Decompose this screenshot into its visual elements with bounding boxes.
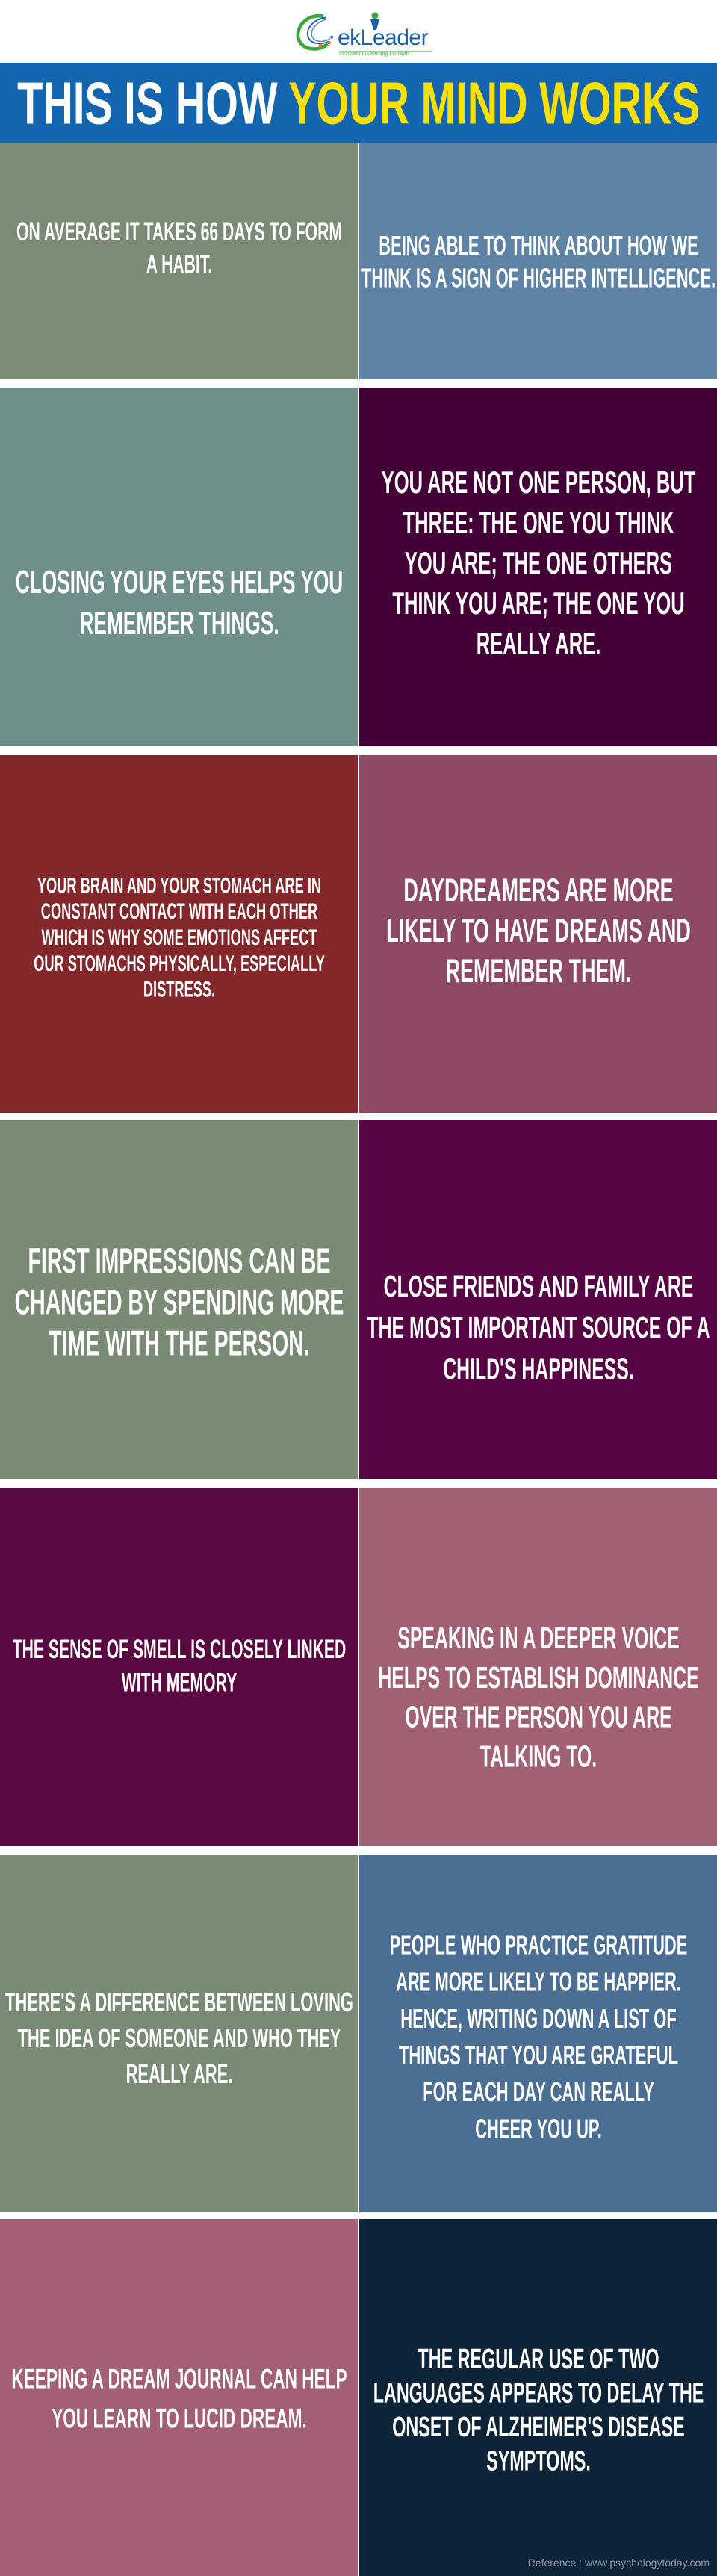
panel: habit: A HABIT. xyxy=(146,250,212,279)
panel: loving idea: THE IDEA OF SOMEONE AND WHO THEY xyxy=(17,2024,341,2053)
panel: intelligence: BEING ABLE TO THINK ABOUT HOW WE xyxy=(379,232,698,261)
panel: gratitude: THINGS THAT YOU ARE GRATEFUL xyxy=(399,2041,677,2070)
panel: loving idea xyxy=(0,1855,358,2212)
icon: swirl xyxy=(296,13,333,51)
panel: daydreamers: DAYDREAMERS ARE MORE xyxy=(403,872,673,909)
panel: daydreamers: REMEMBER THEM. xyxy=(445,952,631,990)
panel: deeper voice: OVER THE PERSON YOU ARE xyxy=(405,1701,671,1734)
panel: closing eyes xyxy=(0,388,358,746)
panel: daydreamers xyxy=(359,755,717,1113)
panel: brain stomach xyxy=(0,755,358,1113)
panel: smell: THE SENSE OF SMELL IS CLOSELY LINKED xyxy=(12,1636,346,1664)
panel: three persons: THINK YOU ARE; THE ONE YOU xyxy=(392,586,684,621)
panel: brain stomach: YOUR BRAIN AND YOUR STOMACH ARE IN xyxy=(37,873,321,899)
title text: THIS IS HOW YOUR MIND WORKS xyxy=(17,69,700,136)
panel: two languages: ONSET OF ALZHEIMER'S DISEASE xyxy=(392,2410,684,2442)
panel: deeper voice: SPEAKING IN A DEEPER VOICE xyxy=(397,1621,679,1656)
panel: friends family: THE MOST IMPORTANT SOURCE OF A xyxy=(367,1311,710,1345)
panel: deeper voice: HELPS TO ESTABLISH DOMINANCE xyxy=(378,1661,698,1695)
panel: loving idea: THERE'S A DIFFERENCE BETWEEN LOVING xyxy=(5,1988,353,2017)
panel: three persons: THREE: THE ONE YOU THINK xyxy=(403,506,674,540)
panel: habit: ON AVERAGE IT TAKES 66 DAYS TO FORM xyxy=(16,218,342,247)
panel: smell xyxy=(0,1488,358,1846)
title banner xyxy=(0,63,717,143)
panel: friends family: CLOSE FRIENDS AND FAMILY ARE xyxy=(383,1270,693,1304)
panel: first impressions: FIRST IMPRESSIONS CAN BE xyxy=(28,1242,330,1281)
panel: first impressions xyxy=(0,1120,358,1479)
panel: friends family: CHILD'S HAPPINESS. xyxy=(443,1352,633,1386)
panel: gratitude: FOR EACH DAY CAN REALLY xyxy=(423,2078,654,2108)
reference note: Reference : www.psychologytoday.com xyxy=(528,2557,710,2569)
panel: closing eyes: CLOSING YOUR EYES HELPS YOU xyxy=(15,563,343,600)
logo text: ekLeader xyxy=(338,25,428,50)
panel: intelligence xyxy=(359,143,717,379)
panel: smell: WITH MEMORY xyxy=(121,1669,237,1698)
panel: first impressions: CHANGED BY SPENDING MORE xyxy=(14,1284,344,1322)
logo xyxy=(296,12,432,57)
panel: intelligence: THINK IS A SIGN OF HIGHER INTELLIGENCE. xyxy=(361,264,716,294)
panel: gratitude: HENCE, WRITING DOWN A LIST OF xyxy=(400,2005,676,2034)
icon: figure xyxy=(370,12,379,30)
panel: gratitude: CHEER YOU UP. xyxy=(475,2114,601,2144)
tagline: Innovation I Learning I Growth xyxy=(339,52,409,57)
panel: deeper voice: TALKING TO. xyxy=(479,1739,597,1774)
panel: gratitude: PEOPLE WHO PRACTICE GRATITUDE xyxy=(389,1931,687,1961)
panel: two languages: LANGUAGES APPEARS TO DELAY THE xyxy=(373,2377,704,2409)
panel: deeper voice xyxy=(359,1488,717,1846)
panel: closing eyes: REMEMBER THINGS. xyxy=(79,604,279,642)
panel: brain stomach: CONSTANT CONTACT WITH EACH OTHER xyxy=(40,899,317,924)
panel: three persons: YOU ARE NOT ONE PERSON, BUT xyxy=(381,465,695,500)
panel: friends family xyxy=(359,1120,717,1479)
panel: brain stomach: DISTRESS. xyxy=(143,977,215,1002)
panel: gratitude xyxy=(359,1855,717,2212)
panel: two languages: THE REGULAR USE OF TWO xyxy=(418,2342,659,2374)
panel: three persons: YOU ARE; THE ONE OTHERS xyxy=(404,546,672,580)
panel: brain stomach: OUR STOMACHS PHYSICALLY, ESPECIALLY xyxy=(34,951,324,976)
panel: dream journal xyxy=(0,2219,358,2576)
panel: two languages: SYMPTOMS. xyxy=(486,2445,590,2477)
panel: three persons xyxy=(359,388,717,746)
panel: loving idea: REALLY ARE. xyxy=(125,2060,232,2089)
panel: brain stomach: WHICH IS WHY SOME EMOTIONS AFFECT xyxy=(41,925,317,950)
panel: gratitude: ARE MORE LIKELY TO BE HAPPIER. xyxy=(396,1967,680,1997)
tagline xyxy=(339,51,432,57)
panel: dream journal: YOU LEARN TO LUCID DREAM. xyxy=(52,2403,306,2434)
panel: first impressions: TIME WITH THE PERSON. xyxy=(49,1325,309,1363)
panel: two languages xyxy=(359,2219,717,2576)
panel: daydreamers: LIKELY TO HAVE DREAMS AND xyxy=(386,912,690,949)
panel: habit xyxy=(0,143,358,379)
panel: dream journal: KEEPING A DREAM JOURNAL CAN HELP xyxy=(11,2363,347,2395)
panel: three persons: REALLY ARE. xyxy=(476,627,600,661)
